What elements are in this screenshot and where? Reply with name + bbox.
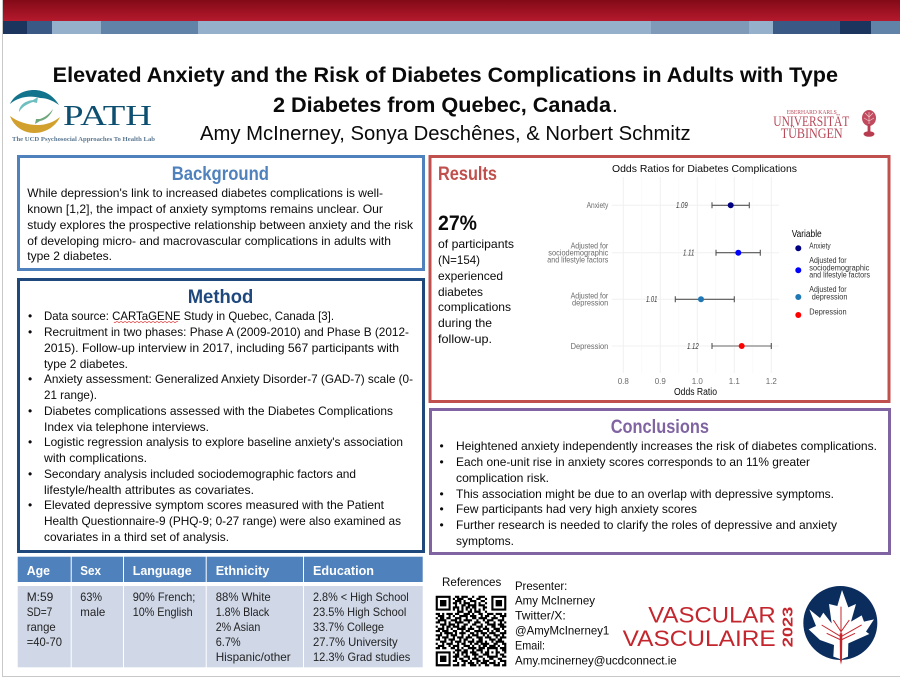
x axis: 1.2 xyxy=(766,377,777,386)
references label: References xyxy=(442,575,501,589)
text: method bullets: • xyxy=(28,467,32,481)
table: sample demographics: Sex xyxy=(80,563,102,578)
text: method bullets: • xyxy=(28,498,32,512)
text: background body: type 2 diabetes. xyxy=(27,249,112,263)
table: sample demographics: 23.5% High School xyxy=(313,605,406,619)
table: sample demographics: 1.8% Black xyxy=(216,605,270,619)
table: sample demographics: 63% xyxy=(80,590,102,604)
logo: University of Tübingen: UNIVERSITÄT xyxy=(773,113,849,130)
callout: 27 percent of participants: complications xyxy=(438,300,511,314)
text: conclusions bullets: • xyxy=(440,439,444,453)
legend: Depression xyxy=(809,307,847,316)
text: conclusions bullets xyxy=(440,439,877,548)
title: Elevated Anxiety and the Risk of Diabetes Complications in Adults with Type xyxy=(53,64,838,87)
y axis labels: Anxiety xyxy=(587,201,608,210)
text: method bullets: Health Questionnaire-9 (PHQ-9; 0-27 range) were also examined as xyxy=(44,514,401,528)
odds ratio values: 1.09 xyxy=(676,201,688,210)
y axis labels: Depression xyxy=(571,342,608,351)
text: method bullets: with complications. xyxy=(43,451,147,465)
table: sample demographics: 10% English xyxy=(133,605,193,619)
legend: depression xyxy=(812,292,847,301)
callout: 27 percent of participants: follow-up. xyxy=(438,332,492,346)
text: conclusions bullets: • xyxy=(440,487,444,501)
y axis labels: Adjusted for xyxy=(571,241,609,250)
legend xyxy=(792,229,870,318)
table: sample demographics: 12.3% Grad studies xyxy=(313,650,410,664)
text: background body: study explores the prospective relationship between anxiety and the risk xyxy=(27,218,414,232)
y axis labels: Adjusted for xyxy=(571,291,609,300)
chart title: Odds Ratios for Diabetes Complications xyxy=(612,163,797,175)
callout: 27 percent of participants: diabetes xyxy=(438,285,483,299)
text: method bullets: Elevated depressive symptom scores measured with the Patient xyxy=(44,498,385,512)
text: presenter contact xyxy=(515,579,677,668)
text: method bullets: • xyxy=(28,435,32,449)
table: sample demographics: range xyxy=(27,620,56,634)
table: sample demographics: M:59 xyxy=(27,590,54,604)
logo: PATH lab: The UCD Psychosocial Approaches To Health Lab xyxy=(12,136,155,143)
text: conclusions bullets: • xyxy=(440,502,444,516)
x axis: 1.1 xyxy=(729,377,740,386)
table: sample demographics xyxy=(18,557,423,667)
text: presenter contact: Twitter/X: xyxy=(515,608,566,622)
text: method bullets: lifestyle/health attributes as covariates. xyxy=(44,483,254,497)
text: method bullets: covariates in a third set of analysis. xyxy=(44,530,229,544)
table: sample demographics: 27.7% University xyxy=(313,635,398,649)
table: sample demographics: male xyxy=(80,605,106,619)
table: sample demographics: Ethnicity xyxy=(216,563,270,578)
text: conclusions bullets: Further research is needed to clarify the roles of depressive and anxiety xyxy=(456,518,837,532)
text: presenter contact: Email: xyxy=(515,638,545,652)
x axis xyxy=(618,377,777,398)
callout: 27 percent of participants: experienced xyxy=(438,269,503,283)
panel: conclusions xyxy=(430,410,890,554)
x axis: 0.8 xyxy=(618,377,629,386)
table: sample demographics: Education xyxy=(313,563,374,578)
heading: method: Method xyxy=(188,286,253,308)
x axis: Odds Ratio xyxy=(674,387,717,398)
text: background body: of developing micro- and macrovascular complications in adults with xyxy=(27,234,391,248)
legend: sociodemographic xyxy=(809,263,869,272)
logo: PATH lab: PATH xyxy=(63,101,152,132)
legend: and lifestyle factors xyxy=(809,270,870,279)
text: conclusions bullets: Each one-unit rise in anxiety scores corresponds to an 11% greater xyxy=(456,455,810,469)
heading: results: Results xyxy=(438,163,497,185)
legend: Adjusted for xyxy=(809,285,847,294)
table: sample demographics: Language xyxy=(133,563,192,578)
callout: 27 percent of participants xyxy=(438,212,514,346)
x axis: 1.0 xyxy=(692,377,703,386)
text: method bullets: 2015). Follow-up interview in 2017, including 567 participants with xyxy=(44,341,399,355)
table: sample demographics: 2.8% < High School xyxy=(313,590,409,604)
text: method bullets: 21 range). xyxy=(44,388,97,402)
text: method bullets: • xyxy=(28,372,32,386)
y axis labels: depression xyxy=(572,299,608,308)
table: sample demographics: 2% Asian xyxy=(216,620,260,634)
text: presenter contact: Amy McInerney xyxy=(515,594,595,608)
heading: background: Background xyxy=(172,163,269,185)
table: sample demographics: =40-70 xyxy=(27,635,62,649)
callout: 27 percent of participants: of participants xyxy=(438,237,514,251)
legend: Variable xyxy=(792,229,822,240)
text: method bullets: Data source: CARTaGENE Study in Quebec, Canada [3]. xyxy=(44,309,334,323)
text: conclusions bullets: symptoms. xyxy=(456,534,514,548)
odds ratio values: 1.11 xyxy=(683,249,694,258)
x axis: 0.9 xyxy=(655,377,666,386)
text: method bullets: • xyxy=(28,404,32,418)
icon: maple leaf emblem xyxy=(803,586,877,665)
table: sample demographics: 90% French; xyxy=(133,590,195,604)
text: conclusions bullets: • xyxy=(440,518,444,532)
table: sample demographics: 88% White xyxy=(216,590,271,604)
text: presenter contact: @AmyMcInerney1 xyxy=(515,624,610,638)
odds ratio values xyxy=(646,201,699,351)
y axis labels: and lifestyle factors xyxy=(547,256,608,265)
text: method bullets: Diabetes complications assessed with the Diabetes Complications xyxy=(44,404,393,418)
text: method bullets: Recruitment in two phases: Phase A (2009-2010) and Phase B (2012- xyxy=(44,325,409,339)
confidence intervals and points xyxy=(675,202,771,349)
title: 2 Diabetes from Quebec, Canada xyxy=(273,94,611,117)
table: sample demographics: Age xyxy=(27,563,50,578)
text: method bullets xyxy=(28,309,413,544)
text: method bullets: Secondary analysis included sociodemographic factors and xyxy=(44,467,356,481)
logo: Vascular 2023 xyxy=(623,586,877,665)
callout: 27 percent of participants: 27% xyxy=(438,212,477,235)
panel: background xyxy=(18,156,424,270)
text: method bullets: Logistic regression analysis to explore baseline anxiety's association xyxy=(44,435,403,449)
text: method bullets: Anxiety assessment: Generalized Anxiety Disorder-7 (GAD-7) scale (0- xyxy=(44,372,413,386)
table: sample demographics: SD=7 xyxy=(27,605,53,619)
text: background body xyxy=(27,186,414,263)
text: conclusions bullets: Few participants had very high anxiety scores xyxy=(456,502,697,516)
text: conclusions bullets: • xyxy=(440,455,444,469)
panel: results xyxy=(430,156,889,402)
icon: references QR code xyxy=(436,596,506,666)
chart: odds ratios forest plot xyxy=(547,163,870,398)
legend: Anxiety xyxy=(809,241,831,250)
callout: 27 percent of participants: during the xyxy=(438,316,492,330)
text: method bullets: • xyxy=(28,325,32,339)
text: conclusions bullets: This association might be due to an overlap with depressive symptoms. xyxy=(456,487,834,501)
text: presenter contact: Amy.mcinerney@ucdconnect.ie xyxy=(515,654,677,668)
logo: University of Tübingen xyxy=(773,109,876,142)
callout: 27 percent of participants: (N=154) xyxy=(438,253,480,267)
heading: conclusions: Conclusions xyxy=(611,416,709,438)
logo: Vascular 2023: VASCULAR xyxy=(648,602,776,628)
text: background body: known [1,2], the impact of anxiety symptoms remains unclear. Our xyxy=(27,202,383,216)
logo: Vascular 2023: 2023 xyxy=(780,607,797,647)
title xyxy=(53,64,838,117)
logo: University of Tübingen: TÜBINGEN xyxy=(781,125,843,142)
text: method bullets: type 2 diabetes. xyxy=(44,357,128,371)
header banner xyxy=(3,0,900,34)
logo: Vascular 2023: VASCULAIRE xyxy=(623,626,776,651)
legend: Adjusted for xyxy=(809,256,847,265)
text: background body: While depression's link to increased diabetes complications is well- xyxy=(27,186,383,200)
logo: PATH lab xyxy=(10,90,155,143)
panel: method xyxy=(18,280,424,552)
text: conclusions bullets: complication risk. xyxy=(456,471,549,485)
y axis labels xyxy=(547,201,609,351)
odds ratio values: 1.12 xyxy=(687,342,699,351)
odds ratio values: 1.01 xyxy=(646,295,657,304)
text: conclusions bullets: Heightened anxiety independently increases the risk of diabetes complications. xyxy=(456,439,877,453)
text: presenter contact: Presenter: xyxy=(515,579,567,593)
title: . xyxy=(612,94,618,117)
logo: University of Tübingen: EBERHARD KARLS xyxy=(787,109,837,116)
text: method bullets: • xyxy=(28,309,32,323)
y axis labels: sociodemographic xyxy=(548,249,608,258)
authors: Amy McInerney, Sonya Deschênes, & Norbert Schmitz xyxy=(200,123,691,145)
text: method bullets: Index via telephone interviews. xyxy=(44,420,209,434)
table: sample demographics: Hispanic/other xyxy=(216,650,291,664)
table: sample demographics: 6.7% xyxy=(216,635,241,649)
table: sample demographics: 33.7% College xyxy=(313,620,384,634)
